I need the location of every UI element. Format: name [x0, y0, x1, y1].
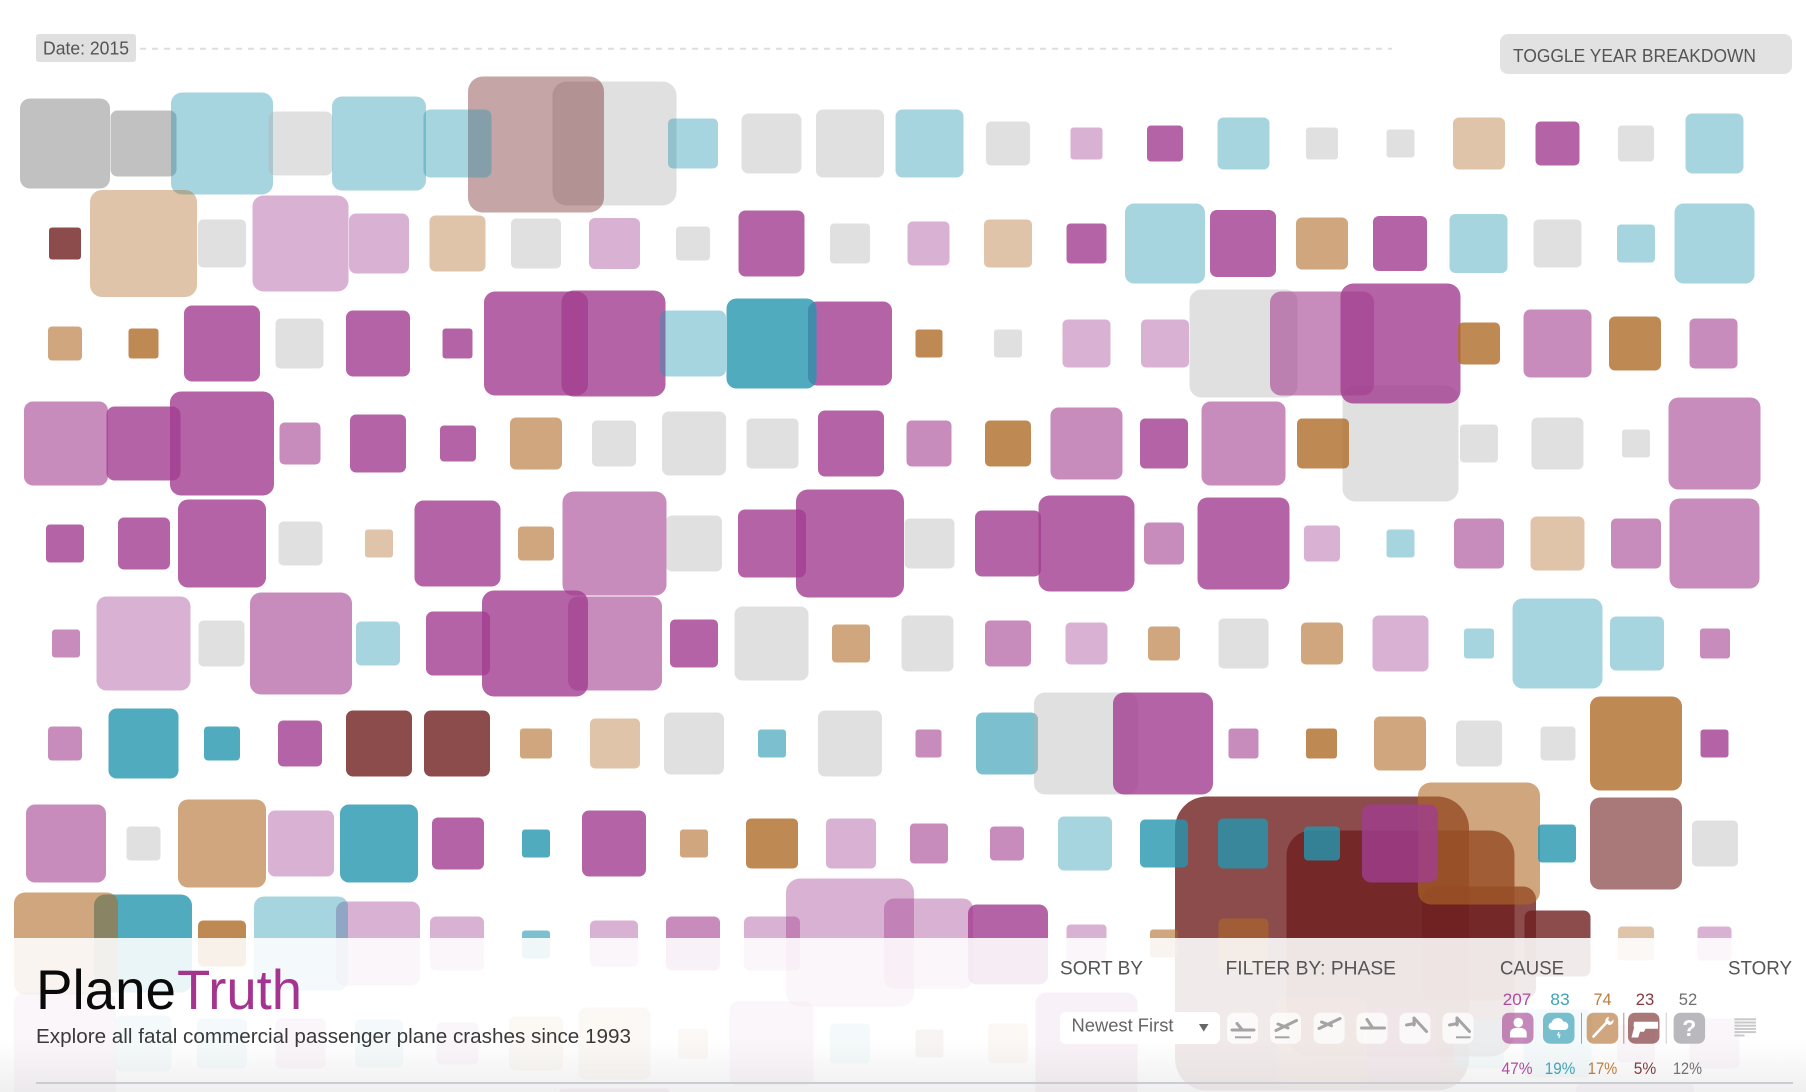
- story icon: [1734, 1018, 1756, 1036]
- footer background: [0, 938, 1806, 1092]
- cause: weather: [1543, 990, 1575, 1078]
- toggle year breakdown button: TOGGLE YEAR BREAKDOWN: [1513, 46, 1756, 66]
- crash squares row 11 tops behind footer: [560, 1084, 1694, 1092]
- date label: [36, 34, 136, 62]
- cause: unknown: [1666, 990, 1705, 1078]
- cause: criminal: [1623, 990, 1660, 1078]
- crash squares row 6: [52, 590, 1730, 696]
- date label: Date: 2015: [43, 38, 129, 58]
- phase filter: approach: [1442, 1013, 1474, 1044]
- logo: [36, 958, 302, 1021]
- cause: unknown: ?: [1682, 1015, 1696, 1041]
- crash squares row 4: [24, 392, 1760, 496]
- phase filter: climb: [1314, 1013, 1345, 1044]
- phase filter: cruise: [1356, 1013, 1388, 1044]
- toggle year breakdown button: [1500, 34, 1792, 74]
- story heading: STORY: [1728, 958, 1792, 980]
- crash squares row 5: [46, 490, 1760, 598]
- phase filter: descent: [1400, 1013, 1430, 1044]
- cause: mechanical: 17%: [1588, 1059, 1617, 1078]
- cause heading: CAUSE: [1500, 958, 1564, 980]
- logo: Plane: [36, 958, 176, 1021]
- crash squares row 7: [48, 692, 1728, 794]
- cause: criminal: 23: [1636, 990, 1654, 1009]
- cause: criminal: 5%: [1634, 1059, 1656, 1078]
- cause: weather: 83: [1550, 990, 1570, 1009]
- crash squares row 9 behind footer: [14, 796, 1732, 1090]
- crash squares row 2: [49, 190, 1754, 297]
- cause: human: 207: [1503, 990, 1531, 1009]
- footer rule: [36, 1082, 1793, 1084]
- crash squares row 10 behind footer: [14, 992, 1740, 1092]
- cause: mechanical: [1581, 990, 1618, 1078]
- filter by phase heading: FILTER BY: PHASE: [1226, 958, 1396, 980]
- cause: unknown: 12%: [1673, 1059, 1702, 1078]
- cause: mechanical: 74: [1594, 990, 1612, 1009]
- cause: human: 47%: [1502, 1059, 1532, 1078]
- phase filter: takeoff: [1270, 1013, 1301, 1044]
- cause: weather: 19%: [1545, 1059, 1575, 1078]
- sort by heading: SORT BY: [1060, 958, 1143, 980]
- sort dropdown: [1060, 1012, 1220, 1044]
- cause: human: [1502, 990, 1534, 1078]
- phase filter: landing: [1227, 1013, 1258, 1044]
- logo: Truth: [177, 958, 302, 1021]
- crash squares row 1: [20, 76, 1744, 212]
- sort dropdown: Newest First: [1072, 1014, 1174, 1036]
- subtitle: Explore all fatal commercial passenger plane crashes since 1993: [36, 1026, 631, 1048]
- cause: unknown: 52: [1679, 990, 1697, 1009]
- crash squares row 8: [26, 782, 1738, 904]
- footer control panel: [0, 938, 1806, 1092]
- timeline dashed line: [140, 48, 1392, 50]
- crash squares row 3: [48, 284, 1738, 502]
